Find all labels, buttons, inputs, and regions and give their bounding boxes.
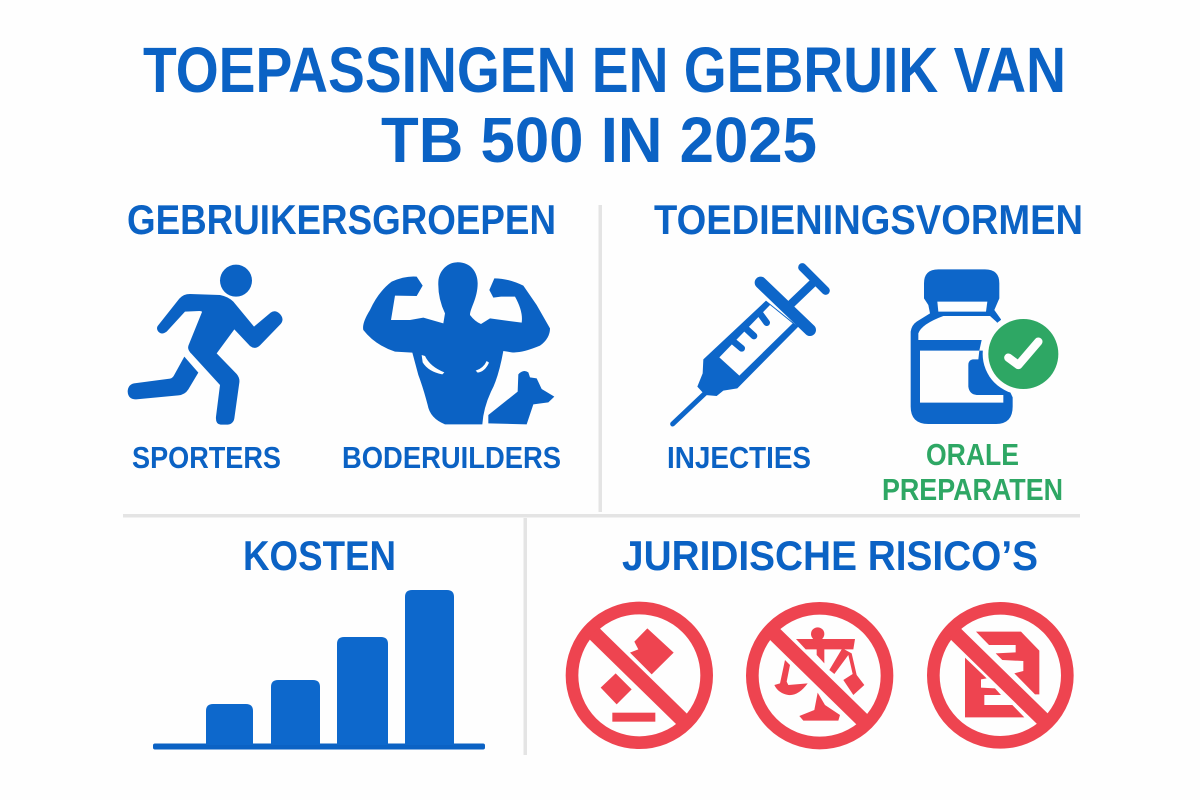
heading: toedieningsvormen: TOEDIENINGSVORMEN [654, 196, 1083, 243]
label: orale preparaten [882, 437, 1063, 507]
panel: toedieningsvormen [654, 196, 1083, 507]
icon: prohibited document [933, 608, 1067, 742]
label: orale preparaten: ORALE [926, 437, 1019, 472]
panel: gebruikersgroepen [127, 196, 561, 475]
icon: prohibited scales [752, 608, 887, 743]
title [143, 34, 1066, 176]
icon: syringe [673, 267, 826, 424]
icon: prohibited gavel [572, 608, 707, 743]
icon: bottle with check [911, 269, 1064, 424]
heading: juridische risico's: JURIDISCHE RISICO’S [622, 532, 1038, 579]
panel: juridische risico's [572, 532, 1067, 743]
heading: kosten: KOSTEN [243, 532, 396, 579]
heading: gebruikersgroepen: GEBRUIKERSGROEPEN [127, 196, 556, 243]
label: boderuilders: BODERUILDERS [342, 440, 561, 475]
label: injecties: INJECTIES [667, 440, 811, 475]
label: orale preparaten: PREPARATEN [882, 472, 1063, 507]
label: sporters: SPORTERS [132, 440, 281, 475]
bar chart [153, 590, 485, 750]
icon: runner [128, 265, 283, 425]
icon: bodybuilder [363, 262, 554, 424]
title: TB 500 IN 2025 [381, 104, 817, 176]
title: TOEPASSINGEN EN GEBRUIK VAN [143, 34, 1066, 106]
panel: kosten [153, 532, 485, 750]
